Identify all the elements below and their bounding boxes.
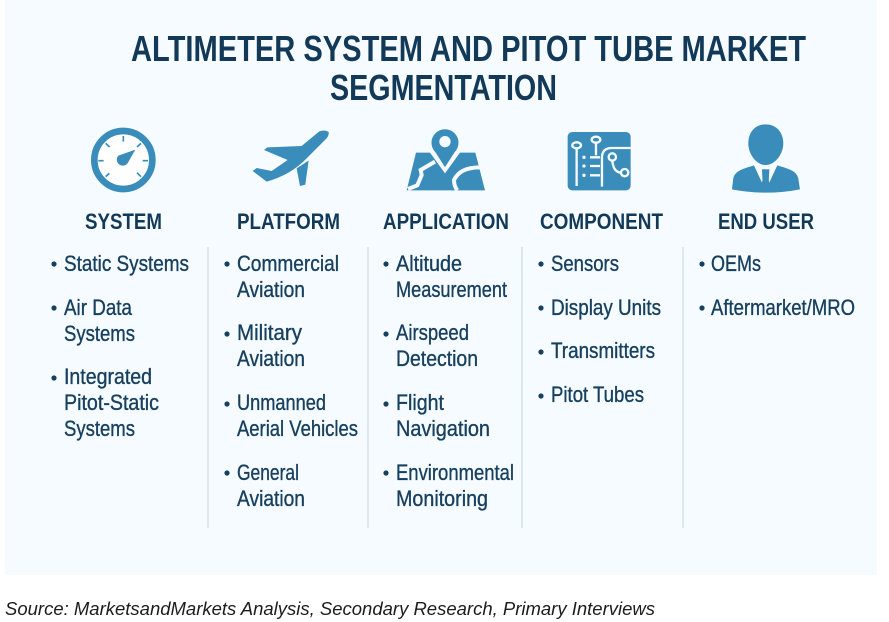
column: system: Static Systems: [64, 251, 189, 276]
icon: businessperson: [732, 124, 800, 193]
column: platform: Commercial: [237, 251, 339, 276]
column: system: [51, 209, 189, 441]
column: end user: Aftermarket/MRO: [711, 295, 855, 320]
title: SEGMENTATION: [330, 67, 557, 108]
column: component: Transmitters: [551, 338, 655, 363]
icon: map with pin: [407, 128, 485, 190]
column: system: Systems: [64, 321, 135, 346]
column: system: Pitot-Static: [64, 390, 159, 415]
column: application: Airspeed: [396, 320, 469, 345]
column: application: Flight: [396, 390, 444, 415]
column: system: Systems: [64, 416, 135, 441]
column: system: SYSTEM: [85, 209, 162, 234]
column: platform: Aviation: [237, 277, 305, 302]
column: application: APPLICATION: [383, 209, 509, 234]
source note: Source: MarketsandMarkets Analysis, Secondary Research, Primary Interviews: [5, 599, 655, 619]
title: [131, 28, 806, 108]
column: platform: [224, 209, 358, 511]
column: component: Pitot Tubes: [551, 382, 644, 407]
column: application: Environmental: [396, 460, 514, 485]
column: application: Monitoring: [396, 486, 488, 511]
column: platform: Aviation: [237, 486, 305, 511]
column: platform: Unmanned: [237, 390, 326, 415]
icon: circuit board: [568, 132, 631, 190]
column: platform: General: [237, 460, 299, 485]
column: platform: Aerial Vehicles: [237, 416, 358, 441]
column: application: Measurement: [396, 277, 507, 302]
column: end user: [699, 209, 855, 320]
column: application: Navigation: [396, 416, 490, 441]
column: component: Sensors: [551, 251, 619, 276]
column: end user: OEMs: [711, 251, 761, 276]
column: component: Display Units: [551, 295, 661, 320]
column: system: Integrated: [64, 364, 152, 389]
column: system: Air Data: [64, 295, 133, 320]
column: component: COMPONENT: [540, 209, 663, 234]
column: component: [538, 209, 663, 407]
column: platform: Military: [237, 320, 302, 345]
column: application: [383, 209, 514, 511]
column: application: Altitude: [396, 251, 462, 276]
icon: gauge: [94, 131, 152, 189]
column: application: Detection: [396, 346, 478, 371]
column: platform: Aviation: [237, 346, 305, 371]
column: platform: PLATFORM: [237, 209, 340, 234]
icon: airplane: [253, 130, 329, 186]
column: end user: END USER: [718, 209, 814, 234]
